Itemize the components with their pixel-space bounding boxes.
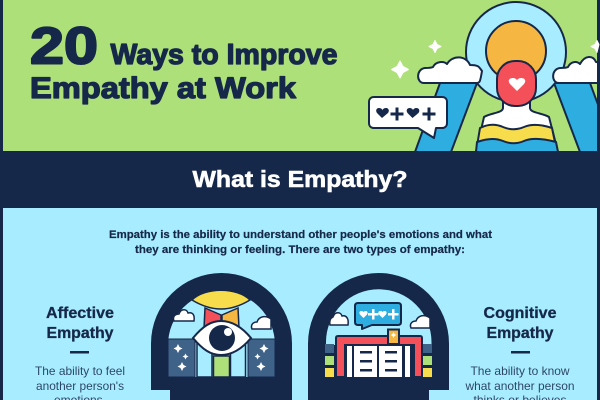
title: Empathy at Work bbox=[30, 72, 297, 105]
right swatches bbox=[423, 344, 432, 377]
pillars bbox=[197, 339, 246, 377]
book cover bbox=[336, 336, 422, 377]
left small cloud bbox=[173, 310, 194, 321]
column: affective empathy bbox=[35, 305, 125, 400]
column: affective empathy: Affective bbox=[46, 305, 114, 322]
column: cognitive empathy bbox=[465, 305, 574, 400]
head illustration: cognitive bbox=[308, 273, 449, 400]
title: Ways to Improve bbox=[110, 39, 338, 71]
lens bbox=[192, 290, 250, 309]
head bbox=[497, 61, 536, 106]
column: cognitive empathy: Empathy bbox=[486, 325, 554, 342]
right small cloud bbox=[410, 316, 430, 328]
icon: heart bbox=[509, 78, 525, 91]
left swatches bbox=[325, 344, 334, 377]
section band bbox=[0, 151, 600, 208]
eye bbox=[193, 321, 251, 355]
book pages bbox=[344, 344, 415, 377]
right cloud bbox=[553, 57, 600, 83]
head illustration: affective bbox=[151, 273, 292, 400]
illustration: person with halo bbox=[369, 2, 600, 152]
sky window bbox=[326, 289, 432, 345]
light beams bbox=[204, 308, 221, 328]
halo circle bbox=[466, 2, 566, 102]
speech bubble bbox=[355, 303, 401, 329]
right small cloud bbox=[251, 317, 271, 329]
column: affective empathy: The ability to feel bbox=[35, 364, 125, 378]
star panels bbox=[168, 339, 275, 377]
speech bubble bbox=[369, 97, 447, 138]
bubble symbols bbox=[359, 309, 398, 320]
column: affective empathy: Empathy bbox=[46, 325, 114, 342]
title: 20 bbox=[30, 18, 98, 76]
sparkles bbox=[392, 40, 599, 78]
body bbox=[476, 100, 558, 152]
header panel bbox=[0, 0, 600, 152]
left arm bbox=[415, 83, 477, 152]
section heading: What is Empathy? bbox=[192, 166, 408, 192]
intro text: Empathy is the ability to understand other people's emotions and what bbox=[109, 229, 492, 241]
column: affective empathy: another person's bbox=[36, 379, 124, 393]
right arm bbox=[554, 83, 600, 152]
sky window bbox=[168, 292, 275, 377]
sun bbox=[486, 21, 546, 81]
column: cognitive empathy: what another person bbox=[465, 379, 574, 393]
side borders bbox=[0, 208, 600, 400]
column: cognitive empathy: Cognitive bbox=[484, 305, 557, 322]
title bbox=[30, 18, 338, 105]
left small cloud bbox=[330, 313, 348, 325]
intro text: they are thinking or feeling. There are two types of empathy: bbox=[135, 244, 465, 256]
icon: bubble symbols bbox=[376, 108, 436, 120]
column: cognitive empathy: The ability to know bbox=[470, 364, 570, 378]
intro text bbox=[109, 229, 492, 256]
bookmark bbox=[388, 330, 399, 344]
left cloud bbox=[418, 57, 482, 83]
